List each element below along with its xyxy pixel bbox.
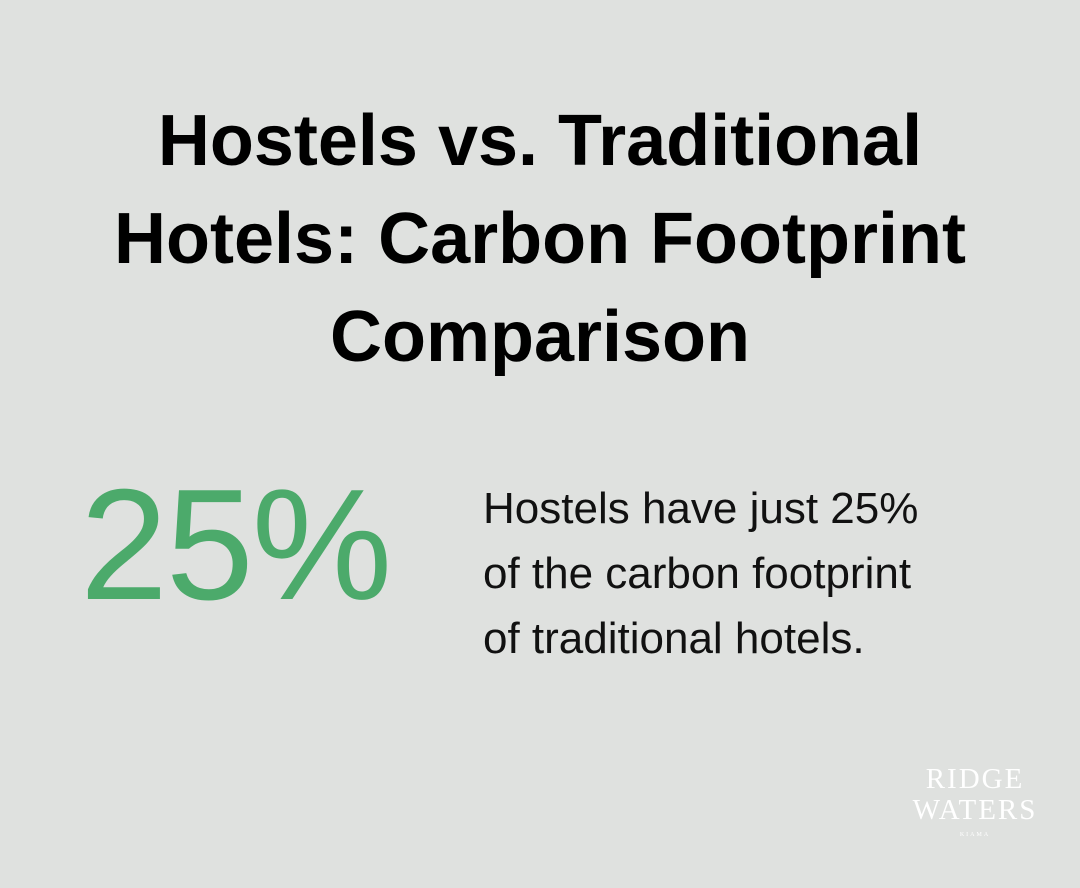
- description text: [483, 484, 918, 663]
- logo: Ridge Waters Kiama: KIAMA: [960, 832, 990, 838]
- title: [114, 101, 966, 377]
- description text: Hostels have just 25%: [483, 484, 918, 533]
- logo: Ridge Waters Kiama: RIDGE: [926, 763, 1024, 795]
- title: Hostels vs. Traditional: [158, 101, 922, 181]
- title: Comparison: [330, 297, 750, 377]
- big stat: 25%: 25%: [80, 457, 390, 633]
- logo: Ridge Waters Kiama: [912, 763, 1037, 838]
- logo: Ridge Waters Kiama: WATERS: [913, 794, 1037, 826]
- title: Hotels: Carbon Footprint: [114, 199, 966, 279]
- description text: of the carbon footprint: [483, 549, 911, 598]
- description text: of traditional hotels.: [483, 614, 865, 663]
